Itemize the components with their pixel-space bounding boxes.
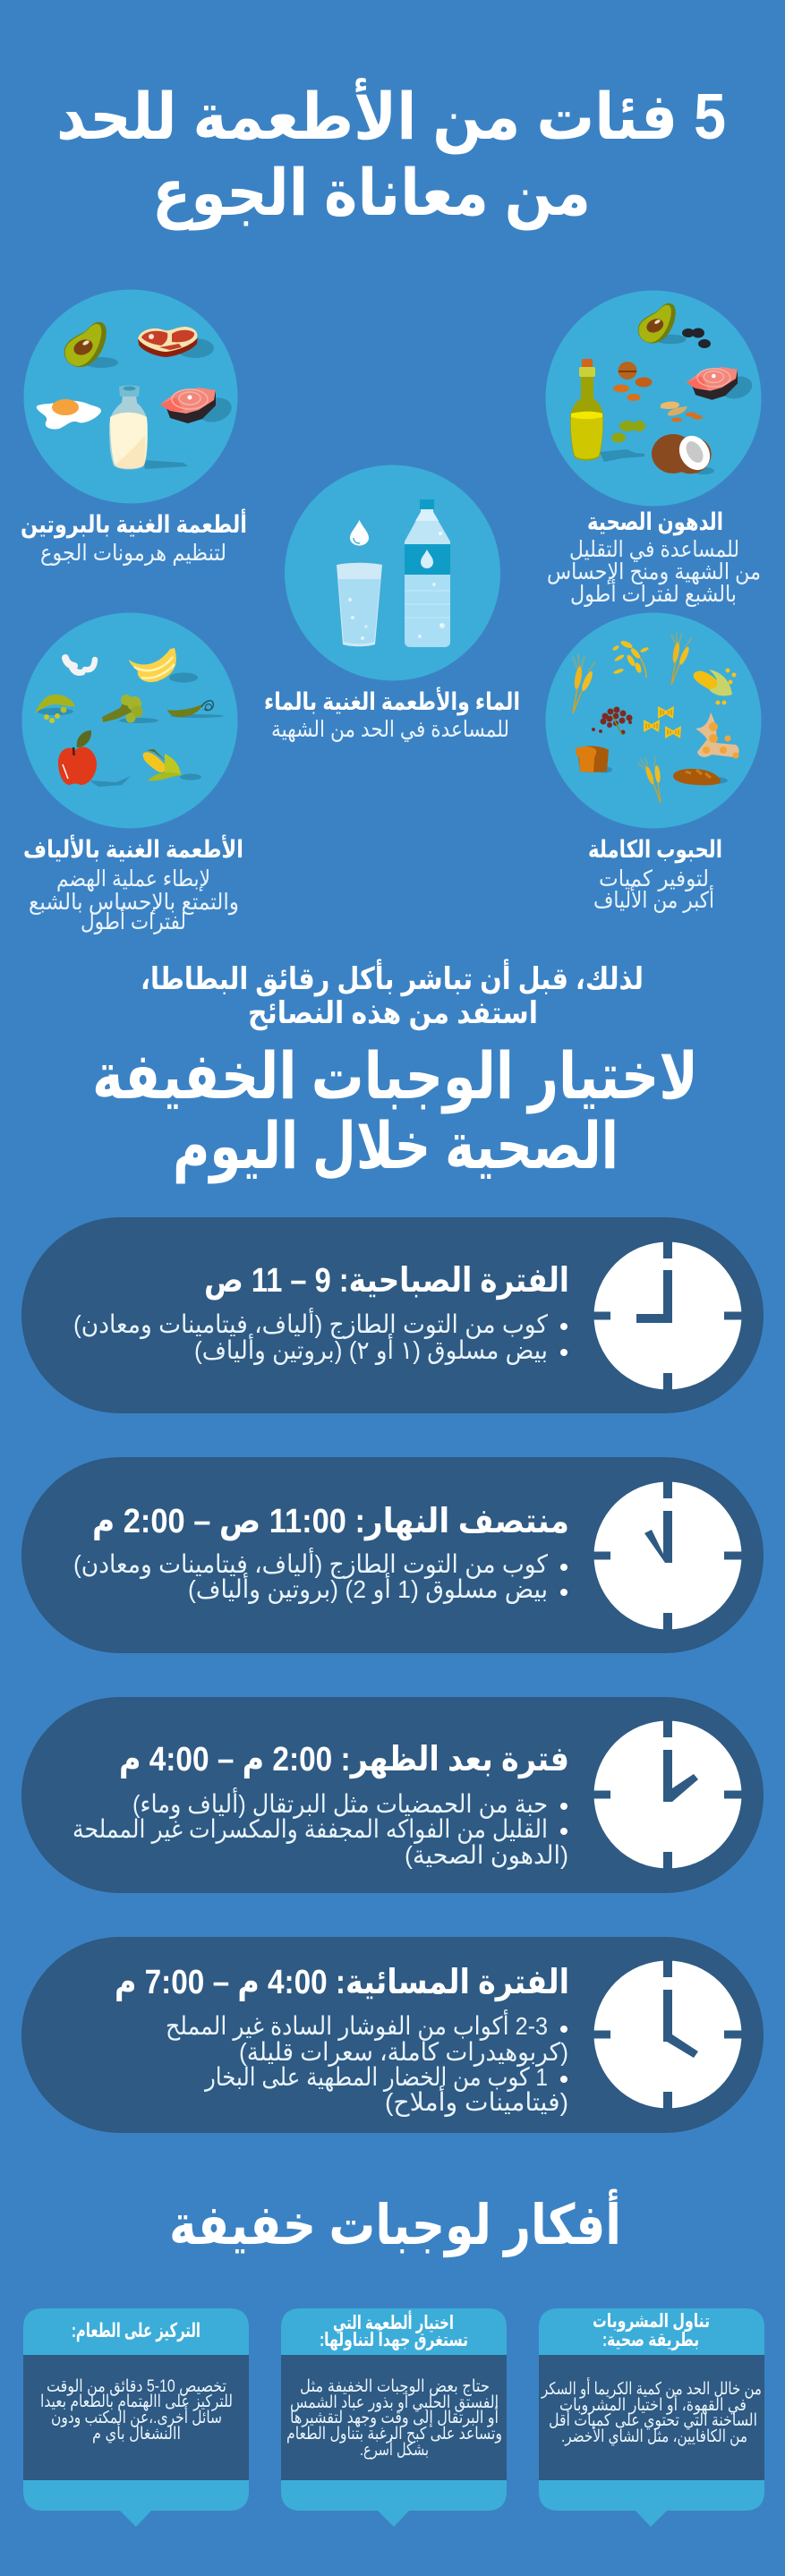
snack list: كوب من التوت الطازج (ألياف، فيتامينات ومعادن) — [73, 1307, 549, 1340]
panel: fiber — [21, 612, 238, 829]
card text: وتساعد على كبح الرغبة بتناول الطعام — [286, 2425, 502, 2444]
icon: salmon steak — [687, 367, 755, 402]
circle: proteins — [23, 290, 238, 503]
pill background — [21, 1457, 764, 1653]
pill background — [21, 1697, 764, 1893]
icon: broccoli — [102, 695, 158, 723]
icon: glass of water — [337, 563, 382, 646]
title: 5 فئات من الأطعمة للحد — [56, 77, 726, 155]
icon: bitter gourd — [167, 701, 224, 718]
heading: healthy fats: للمساعدة في التقليل — [569, 537, 739, 562]
card text: سائل أخرى.،عن المكتب ودون — [51, 2406, 222, 2427]
icon: water bottle — [405, 499, 450, 647]
icon: buckwheat — [592, 707, 632, 735]
icon: soy pods — [695, 712, 739, 759]
icon: milk bottle — [109, 385, 188, 469]
card body — [539, 2355, 764, 2480]
title — [56, 77, 726, 231]
heading: healthy fats: من الشهية ومنح الإحساس — [547, 559, 761, 585]
icon: nuts — [613, 362, 703, 422]
icon: green olives — [611, 421, 645, 442]
icon: avocado — [64, 322, 118, 368]
card text: الفستق الحلبي أو بذور عباد الشمس — [290, 2391, 499, 2412]
icon: bread loaf — [576, 746, 612, 773]
intro text — [141, 959, 644, 1031]
icon: clock 11:00 — [593, 1481, 742, 1630]
card title: تستغرق جهداً لتناولها: — [320, 2325, 468, 2350]
heading: whole grains — [588, 836, 722, 913]
intro text: لذلك، قبل أن تباشر بأكل رقائق البطاطا، — [141, 959, 644, 997]
heading: snack ideas: أفكار لوجبات خفيفة — [169, 2188, 621, 2257]
snack list — [73, 1547, 567, 1604]
heading: whole grains: لتوفير كميات — [599, 866, 709, 891]
card title: بطريقة صحية: — [602, 2330, 699, 2350]
card title: تناول المشروبات — [593, 2311, 710, 2332]
panel: proteins — [23, 290, 238, 503]
card: foods that take effort — [281, 2308, 507, 2527]
icon: baguette — [673, 769, 728, 785]
icon: egg — [37, 399, 101, 429]
icon: pasta bows — [644, 706, 681, 738]
panel: midday — [21, 1457, 764, 1653]
card text: للتركيز على االهتمام بالطعام بعيدا — [40, 2393, 233, 2411]
heading: healthy snacks: الصحية خلال اليوم — [173, 1111, 619, 1184]
snack list: (كربوهيدرات كاملة، سعرات قليلة) — [239, 2038, 568, 2067]
card title — [320, 2309, 468, 2350]
period title: منتصف النهار: 11:00 ص – 2:00 م — [92, 1503, 569, 1541]
card body — [23, 2355, 249, 2480]
card: healthy drinks — [539, 2308, 764, 2527]
icon: steak — [138, 327, 214, 358]
icon: peas — [35, 695, 75, 723]
heading: water — [264, 687, 520, 743]
card text — [541, 2377, 762, 2446]
card shape — [281, 2308, 507, 2527]
heading: fiber: والتمتع بالإحساس بالشبع — [29, 890, 239, 916]
icon: apple — [58, 730, 131, 787]
heading: fiber: لإبطاء عملية الهضم — [56, 866, 210, 892]
heading: water: للمساعدة في الحد من الشهية — [271, 717, 509, 743]
snack list: حبة من الحمضيات مثل البرتقال (ألياف وماء) — [132, 1787, 548, 1819]
snack list: (فيتامينات وأملاح) — [385, 2085, 568, 2117]
snack list: كوب من التوت الطازج (ألياف، فيتامينات ومعادن) — [73, 1547, 549, 1580]
card text: في القهوة، أو اختيار المشروبات — [559, 2393, 747, 2415]
panel: water — [285, 465, 500, 680]
period title: الفترة المسائية: 4:00 م – 7:00 م — [115, 1964, 569, 2002]
icon: clock 4:00 — [593, 1960, 742, 2109]
snack list: 1 كوب من الخضار المطهية على البخار — [203, 2063, 548, 2092]
pill background — [21, 1937, 764, 2133]
card text — [40, 2377, 233, 2444]
card shape — [23, 2308, 249, 2527]
icon: wheat ear — [671, 632, 691, 685]
icon: cashews — [65, 658, 95, 672]
icon: coconut — [652, 431, 717, 480]
snack list — [73, 1787, 568, 1870]
period title: فترة بعد الظهر: 2:00 م – 4:00 م — [119, 1741, 569, 1779]
circle: grains — [546, 612, 761, 829]
icon: corn cob — [694, 668, 736, 705]
snack list: القليل من الفواكه المجففة والمكسرات غير المملحة — [73, 1815, 548, 1844]
snack list: (الدهون الصحية) — [405, 1841, 568, 1870]
card text: االنشغال بأي م — [92, 2421, 181, 2444]
pill background — [21, 1217, 764, 1413]
heading: fiber — [23, 834, 243, 934]
card text: أو البرتقال إلى وقت وجهد لتقشيرها — [290, 2406, 499, 2428]
title: من معاناة الجوع — [152, 158, 591, 231]
card title: اختيار ألطعمة التي — [333, 2309, 454, 2333]
card title — [593, 2311, 710, 2350]
icon: corn — [143, 749, 201, 780]
heading: proteins: ألطعمة الغنية بالبروتين — [21, 508, 247, 539]
heading: healthy snacks — [92, 1041, 698, 1184]
card: focus on food — [23, 2308, 249, 2527]
icon: salmon steak — [160, 388, 235, 425]
card text: تخصيص 10-5 دقائق من الوقت — [47, 2377, 226, 2396]
snack list — [73, 1307, 567, 1365]
heading: healthy fats — [547, 508, 761, 608]
snack list: 2-3 أكواب من الفوشار السادة غير المملح — [166, 2009, 548, 2041]
panel: afternoon — [21, 1697, 764, 1893]
icon: water drop — [350, 520, 369, 546]
panel: evening — [21, 1937, 764, 2133]
panel: healthy fats — [546, 290, 761, 507]
icon: banana — [129, 648, 198, 682]
period title: الفترة الصباحية: 9 – 11 ص — [204, 1262, 569, 1300]
heading: proteins: لتنظيم هرمونات الجوع — [40, 541, 226, 567]
icon: oats — [612, 639, 649, 678]
card text: حتاج بعض الوجبات الخفيفة مثل — [300, 2377, 490, 2396]
heading: fiber: لفترات أطول — [81, 906, 186, 934]
card body — [281, 2355, 507, 2480]
card text: بشكل أسرع. — [360, 2438, 429, 2460]
heading: whole grains: الحبوب الكاملة — [588, 836, 722, 864]
panel: whole grains — [546, 612, 761, 829]
heading: whole grains: أكبر من الألياف — [593, 884, 714, 913]
icon: wheat stalk — [636, 752, 677, 803]
heading: healthy fats: الدهون الصحية — [587, 508, 723, 536]
heading: proteins — [21, 508, 247, 567]
heading: healthy fats: بالشبع لفترات أطول — [570, 578, 737, 608]
card shape — [539, 2308, 764, 2527]
circle: water — [285, 465, 500, 680]
card title: التركيز على الطعام: — [72, 2319, 201, 2342]
intro text: استفد من هذه النصائح — [248, 996, 538, 1031]
heading: water: الماء والأطعمة الغنية بالماء — [264, 687, 520, 716]
snack list: بيض مسلوق (١ أو ٢) (بروتين وألياف) — [194, 1333, 548, 1365]
icon: clock 2:00 — [593, 1720, 742, 1869]
circle: fiber — [21, 612, 238, 829]
snack list — [166, 2009, 568, 2117]
icon: wheat — [573, 654, 595, 713]
heading: fiber: الأطعمة الغنية بالألياف — [23, 834, 243, 863]
circle: fats — [546, 290, 761, 507]
card text — [286, 2377, 502, 2460]
icon: oil bottle — [570, 359, 644, 462]
panel: morning — [21, 1217, 764, 1413]
icon: avocado — [638, 303, 686, 344]
icon: clock 9:00 — [593, 1241, 742, 1390]
icon: black olives — [682, 328, 711, 348]
snack list: بيض مسلوق (1 أو 2) (بروتين وألياف) — [188, 1572, 548, 1604]
